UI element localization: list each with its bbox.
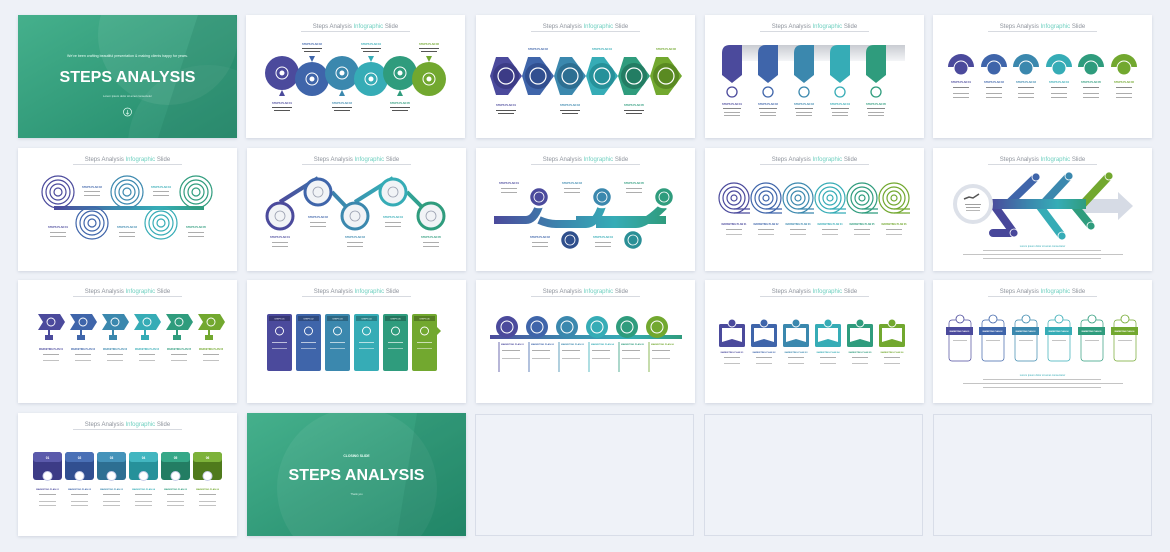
slide 2: pins: STEPS PLAN 06: [419, 42, 439, 46]
slide 5: domes: STEPS PLAN 05: [1081, 80, 1101, 84]
slide 12: tall boxes: STEPS 03: [332, 318, 343, 320]
slide 12: tall boxes: STEPS 05: [390, 318, 401, 320]
slide 6: spirals two rows: Steps Analysis Infographic Slide: [85, 157, 171, 163]
slide 12: tall boxes: STEPS 04: [361, 318, 372, 320]
slide 14: tag boxes: MARKETING PLAN 02: [753, 351, 776, 354]
slide 13: circles on bar: MARKETING PLAN 01: [501, 343, 525, 346]
slide 7: zigzag chain: STEPS PLAN 02: [308, 215, 328, 219]
slide 4: ribbons: STEPS PLAN 05: [866, 102, 886, 106]
slide 11: chevrons: MARKETING PLAN 06: [199, 348, 224, 351]
slide 7: zigzag chain: STEPS PLAN 04: [383, 215, 403, 219]
slide 13: circles on bar: MARKETING PLAN 02: [531, 343, 555, 346]
slide 15: outline cards: MARKETING PLAN 02: [983, 330, 1002, 333]
slide 7: zigzag chain: Steps Analysis Infographic Slide: [314, 157, 400, 163]
empty slot 2: [704, 414, 923, 536]
slide 2: pins: [246, 15, 465, 138]
slide 8: road: STEPS PLAN 03: [562, 181, 582, 185]
slide 16: numbered boxes: 03: [110, 456, 113, 460]
slide 2: pins: STEPS PLAN 03: [332, 101, 352, 105]
slide 9: spiral row: MARKETING PLAN 05: [850, 223, 875, 226]
slide 16: numbered boxes: MARKETING PLAN 03: [100, 488, 124, 491]
slide 6: spirals two rows: STEPS PLAN 04: [151, 185, 171, 189]
slide 15: outline cards: MARKETING PLAN 01: [950, 330, 969, 333]
slide 9: spiral row: [705, 148, 924, 271]
slide 17: closing cover: STEPS ANALYSIS: [288, 467, 425, 484]
slide 4: ribbons: STEPS PLAN 03: [794, 102, 814, 106]
slide 5: domes: [933, 15, 1152, 138]
slide 3: hex-arrow circles: STEPS PLAN 03: [560, 103, 580, 107]
slide 4: ribbons: STEPS PLAN 04: [830, 102, 850, 106]
slide 8: road: Steps Analysis Infographic Slide: [543, 157, 629, 163]
slide 2: pins: STEPS PLAN 04: [361, 42, 381, 46]
slide 10: fishbone: [933, 148, 1152, 271]
slide 9: spiral row: MARKETING PLAN 02: [754, 223, 779, 226]
slide 1: title cover: STEPS ANALYSIS: [60, 69, 196, 86]
slide 14: tag boxes: MARKETING PLAN 01: [721, 351, 744, 354]
slide 11: chevrons: [18, 280, 237, 403]
slide 12: tall boxes: Steps Analysis Infographic Slide: [314, 289, 400, 295]
slide 14: tag boxes: MARKETING PLAN 03: [785, 351, 808, 354]
slide 8: road: [476, 148, 695, 271]
slide 14: tag boxes: [705, 280, 924, 403]
empty slot 1: [475, 414, 694, 536]
slide 16: numbered boxes: 06: [206, 456, 209, 460]
slide 3: hex-arrow circles: STEPS PLAN 06: [656, 47, 676, 51]
slide 16: numbered boxes: Steps Analysis Infographic Slide: [85, 422, 171, 428]
slide 15: outline cards: Steps Analysis Infographic Slide: [1000, 289, 1086, 295]
slide 9: spiral row: MARKETING PLAN 01: [722, 223, 747, 226]
slide 3: hex-arrow circles: STEPS PLAN 01: [496, 103, 516, 107]
slide 3: hex-arrow circles: STEPS PLAN 04: [592, 47, 612, 51]
slide 14: tag boxes: MARKETING PLAN 06: [881, 351, 904, 354]
slide 7: zigzag chain: STEPS PLAN 01: [270, 235, 290, 239]
slide 9: spiral row: MARKETING PLAN 06: [882, 223, 907, 226]
slide 16: numbered boxes: 04: [142, 456, 145, 460]
slide 3: hex-arrow circles: STEPS PLAN 05: [624, 103, 644, 107]
slide 15: outline cards: MARKETING PLAN 05: [1082, 330, 1101, 333]
slide 8: road: STEPS PLAN 05: [624, 181, 644, 185]
slide 6: spirals two rows: [18, 148, 237, 271]
slide 2: pins: STEPS PLAN 01: [272, 101, 292, 105]
slide 1: title cover: Lorem ipsum dolor sit amet consectetur: [103, 94, 152, 98]
slide 2: pins: Steps Analysis Infographic Slide: [313, 24, 399, 30]
slide 15: outline cards: [933, 280, 1152, 403]
slide 12: tall boxes: [247, 280, 466, 403]
slide 6: spirals two rows: STEPS PLAN 05: [186, 225, 206, 229]
slide 11: chevrons: MARKETING PLAN 03: [103, 348, 128, 351]
slide 9: spiral row: MARKETING PLAN 04: [818, 223, 843, 226]
slide 4: ribbons: Steps Analysis Infographic Slide: [772, 24, 858, 30]
slide 3: hex-arrow circles: STEPS PLAN 02: [528, 47, 548, 51]
slide 11: chevrons: MARKETING PLAN 05: [167, 348, 192, 351]
slide 15: outline cards: MARKETING PLAN 04: [1049, 330, 1069, 333]
slide 4: ribbons: STEPS PLAN 02: [758, 102, 778, 106]
slide 8: road: STEPS PLAN 02: [530, 235, 550, 239]
slide 1: title cover: We've been crafting beautiful presentation & making clients happy for years.: [67, 54, 188, 58]
slide 10: fishbone: Steps Analysis Infographic Slide: [1000, 157, 1086, 163]
slide 16: numbered boxes: 01: [46, 456, 49, 460]
slide 14: tag boxes: Steps Analysis Infographic Slide: [772, 289, 858, 295]
slide 6: spirals two rows: STEPS PLAN 01: [48, 225, 68, 229]
slide 7: zigzag chain: [247, 148, 466, 271]
slide 8: road: STEPS PLAN 01: [499, 181, 519, 185]
slide 2: pins: STEPS PLAN 05: [390, 101, 410, 105]
slide 5: domes: STEPS PLAN 03: [1016, 80, 1036, 84]
slide 16: numbered boxes: MARKETING PLAN 04: [132, 488, 156, 491]
slide 3: hex-arrow circles: [476, 15, 695, 138]
slide 11: chevrons: MARKETING PLAN 02: [71, 348, 96, 351]
slide 15: outline cards: Lorem ipsum dolor sit amet consectetur: [1020, 373, 1065, 377]
slide 17: closing cover: [247, 413, 466, 536]
slide 12: tall boxes: STEPS 02: [303, 318, 314, 320]
slide 16: numbered boxes: MARKETING PLAN 02: [68, 488, 92, 491]
slide 5: domes: Steps Analysis Infographic Slide: [1000, 24, 1086, 30]
slide 15: outline cards: MARKETING PLAN 03: [1016, 330, 1035, 333]
slide 16: numbered boxes: 05: [174, 456, 177, 460]
slide 13: circles on bar: MARKETING PLAN 03: [561, 343, 585, 346]
slide 2: pins: STEPS PLAN 02: [302, 42, 322, 46]
slide 1: title cover: [18, 15, 237, 138]
empty slot 3: [933, 414, 1152, 536]
slide 13: circles on bar: MARKETING PLAN 05: [621, 343, 645, 346]
slide 3: hex-arrow circles: Steps Analysis Infographic Slide: [543, 24, 629, 30]
slide 16: numbered boxes: MARKETING PLAN 05: [164, 488, 188, 491]
slide 4: ribbons: STEPS PLAN 01: [722, 102, 742, 106]
slide 9: spiral row: MARKETING PLAN 03: [786, 223, 811, 226]
slide 17: closing cover: CLOSING SLIDE: [343, 454, 370, 458]
slide 7: zigzag chain: STEPS PLAN 05: [421, 235, 441, 239]
slide 9: spiral row: Steps Analysis Infographic Slide: [772, 157, 858, 163]
slide 5: domes: STEPS PLAN 02: [984, 80, 1004, 84]
slide 13: circles on bar: Steps Analysis Infographic Slide: [543, 289, 629, 295]
slide 17: closing cover: Thank you: [350, 492, 363, 496]
slide 11: chevrons: Steps Analysis Infographic Slide: [85, 289, 171, 295]
slide 5: domes: STEPS PLAN 01: [951, 80, 971, 84]
slide 12: tall boxes: STEPS 01: [274, 318, 285, 320]
slide 6: spirals two rows: STEPS PLAN 03: [117, 225, 137, 229]
slide 14: tag boxes: MARKETING PLAN 05: [849, 351, 872, 354]
slide 11: chevrons: MARKETING PLAN 04: [135, 348, 160, 351]
slide 4: ribbons: [705, 15, 924, 138]
slide 16: numbered boxes: [18, 413, 237, 536]
slide 15: outline cards: MARKETING PLAN 06: [1115, 330, 1134, 333]
slide 13: circles on bar: MARKETING PLAN 04: [591, 343, 615, 346]
slide 16: numbered boxes: 02: [78, 456, 81, 460]
slide 5: domes: STEPS PLAN 06: [1114, 80, 1134, 84]
slide 5: domes: STEPS PLAN 04: [1049, 80, 1069, 84]
slide 8: road: STEPS PLAN 04: [593, 235, 613, 239]
slide 10: fishbone: Lorem ipsum dolor sit amet consectetur: [1020, 244, 1065, 248]
slide 6: spirals two rows: STEPS PLAN 02: [82, 185, 102, 189]
slide 13: circles on bar: MARKETING PLAN 06: [651, 343, 675, 346]
slide 13: circles on bar: [476, 280, 695, 403]
slide 7: zigzag chain: STEPS PLAN 03: [345, 235, 365, 239]
slide 16: numbered boxes: MARKETING PLAN 06: [196, 488, 220, 491]
slide 14: tag boxes: MARKETING PLAN 04: [817, 351, 840, 354]
slide 16: numbered boxes: MARKETING PLAN 01: [36, 488, 60, 491]
slide 12: tall boxes: STEPS 06: [419, 318, 430, 320]
slide 11: chevrons: MARKETING PLAN 01: [39, 348, 64, 351]
